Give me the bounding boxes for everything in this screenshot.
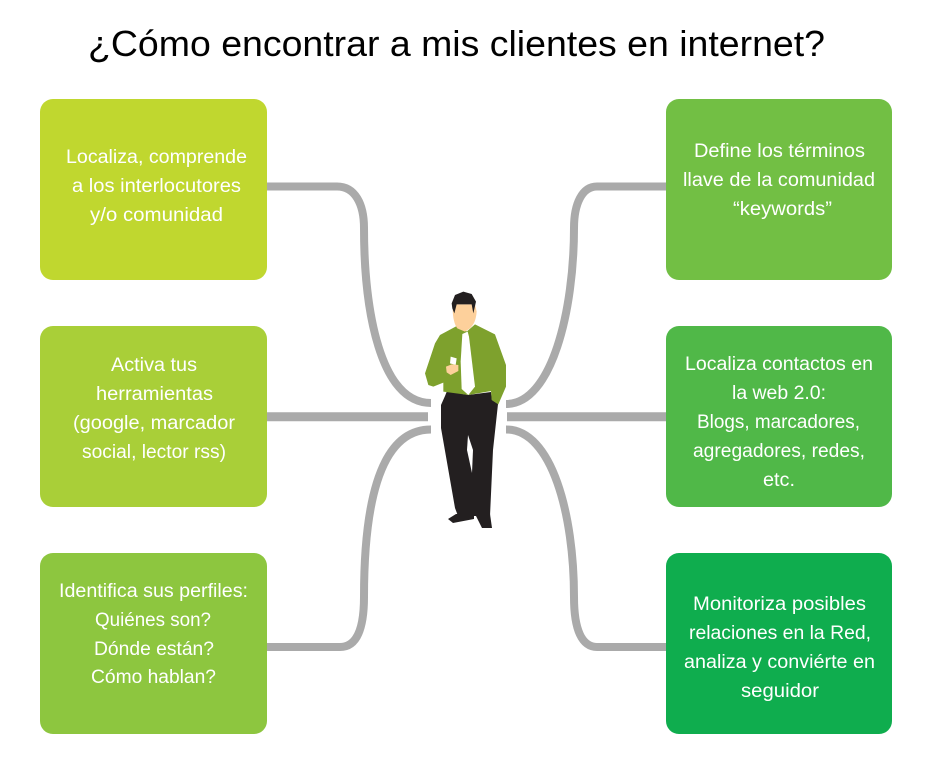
panel: contactos <box>666 326 892 507</box>
panel: herramientas: (google, marcador <box>73 413 236 434</box>
connector: bottom left <box>267 430 431 647</box>
connector: top right <box>506 186 666 404</box>
panel: contactos: agregadores, redes, <box>693 441 865 462</box>
panel: herramientas: social, lector rss) <box>82 442 226 463</box>
panel: herramientas <box>40 326 267 507</box>
panel: herramientas: herramientas <box>96 384 213 405</box>
panel: perfiles: Dónde están? <box>94 639 214 660</box>
panel: localiza: Localiza, comprende <box>66 147 247 168</box>
connector: top left <box>267 186 431 403</box>
panel: contactos: la web 2.0: <box>732 383 826 404</box>
panel: keywords: “keywords” <box>733 199 832 220</box>
panel: localiza: a los interlocutores <box>72 176 241 197</box>
panel: monitoriza: analiza y conviérte en <box>684 652 875 673</box>
connector: bottom right <box>506 430 666 647</box>
panel: perfiles: Cómo hablan? <box>91 667 216 688</box>
panel: localiza: y/o comunidad <box>90 205 223 226</box>
connectors <box>267 186 666 647</box>
panel: keywords: llave de la comunidad <box>683 170 875 191</box>
panel: contactos: etc. <box>763 470 795 491</box>
panel: monitoriza: relaciones en la Red, <box>689 623 871 644</box>
panel: contactos: Localiza contactos en <box>685 354 873 375</box>
panel: keywords <box>666 99 892 280</box>
panel: monitoriza: seguidor <box>741 681 820 702</box>
panel: perfiles <box>40 553 267 734</box>
panel: monitoriza <box>666 553 892 734</box>
panel: perfiles: Quiénes son? <box>95 610 211 631</box>
connector: middle left <box>267 412 428 421</box>
panel: localiza <box>40 99 267 280</box>
panel: monitoriza: Monitoriza posibles <box>693 594 866 615</box>
title: ¿Cómo encontrar a mis clientes en internet? <box>88 23 825 64</box>
panel: perfiles: Identifica sus perfiles: <box>59 581 248 602</box>
panel: contactos: Blogs, marcadores, <box>697 412 860 433</box>
icon: businessman figure <box>425 292 506 528</box>
connector: middle right <box>507 412 666 421</box>
panel: keywords: Define los términos <box>694 141 865 162</box>
panel: herramientas: Activa tus <box>111 355 197 376</box>
